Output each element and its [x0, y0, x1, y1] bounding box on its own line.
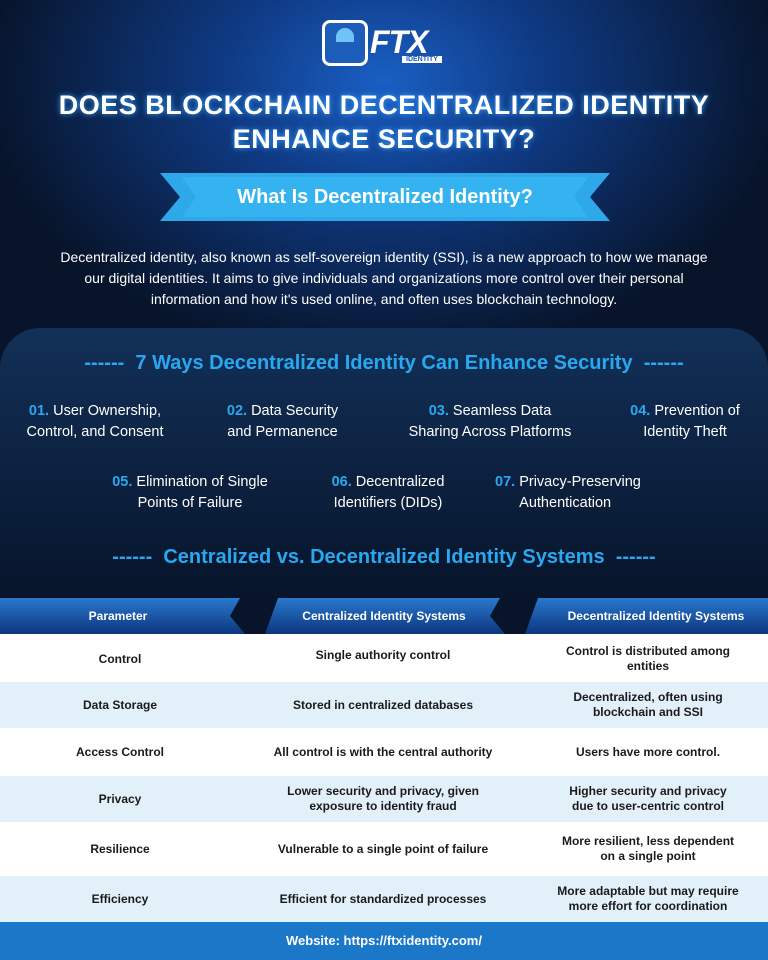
row: privacy: Privacy — [99, 792, 141, 806]
way 03: 03. Seamless Data — [429, 403, 551, 419]
way 02: and Permanence — [227, 424, 338, 440]
row: access control: All control is with the central authority — [274, 744, 492, 758]
title: ENHANCE SECURITY? — [233, 124, 535, 154]
row: privacy: Higher security and privacy — [569, 784, 727, 798]
row: efficiency: More adaptable but may require — [557, 884, 739, 898]
row: efficiency — [0, 876, 768, 922]
ribbon: what is decentralized identity: What Is Decentralized Identity? — [237, 186, 533, 208]
way 02 — [227, 403, 338, 440]
background glow — [0, 0, 768, 340]
way 01: Control, and Consent — [26, 424, 164, 440]
intro text: Decentralized identity, also known as self-sovereign identity (SSI), is a new approach to how we manage — [60, 249, 708, 265]
title — [56, 90, 711, 154]
way 07: 07. Privacy-Preserving — [495, 474, 641, 490]
heading: comparison: ------ Centralized vs. Decentralized Identity Systems ------ — [112, 546, 656, 568]
way 04: Identity Theft — [643, 424, 727, 440]
way 04: 04. Prevention of — [630, 403, 740, 419]
way 05 — [112, 474, 268, 511]
row: access control — [0, 728, 768, 776]
footer — [0, 922, 768, 960]
way 01 — [26, 403, 164, 440]
footer: Website: https://ftxidentity.com/ — [286, 933, 482, 948]
table header: Parameter — [89, 609, 148, 623]
intro text: our digital identities. It aims to give individuals and organizations more control over their personal — [84, 270, 684, 286]
row: resilience: Resilience — [90, 842, 150, 856]
way 07 — [495, 474, 641, 511]
row: efficiency: Efficient for standardized processes — [280, 892, 486, 906]
row: control: Control — [99, 652, 141, 666]
panel: 7 ways — [0, 328, 768, 600]
way 06: Identifiers (DIDs) — [334, 495, 442, 511]
table header: Decentralized Identity Systems — [568, 609, 745, 623]
row: efficiency: more effort for coordination — [569, 899, 727, 913]
table header — [0, 598, 768, 634]
row: control: Single authority control — [316, 648, 450, 662]
row: resilience: Vulnerable to a single point of failure — [278, 842, 488, 856]
way 03 — [409, 403, 571, 440]
row: privacy: due to user-centric control — [572, 799, 724, 813]
row: control: Control is distributed among — [566, 644, 730, 658]
way 07: Authentication — [519, 495, 611, 511]
row: resilience: on a single point — [600, 849, 696, 863]
row: resilience: More resilient, less dependent — [562, 834, 734, 848]
way 03: Sharing Across Platforms — [409, 424, 571, 440]
row: data storage: Data Storage — [83, 698, 157, 712]
way 05: Points of Failure — [138, 495, 242, 511]
way 05: 05. Elimination of Single — [112, 474, 268, 490]
logo — [322, 20, 442, 66]
table — [0, 598, 768, 922]
row: control: entities — [627, 659, 669, 673]
title: DOES BLOCKCHAIN DECENTRALIZED IDENTITY — [59, 90, 709, 120]
row: privacy: exposure to identity fraud — [309, 799, 457, 813]
row: data storage — [0, 682, 768, 728]
way 04 — [630, 403, 740, 440]
heading: 7 ways: ------ 7 Ways Decentralized Identity Can Enhance Security ------ — [84, 352, 684, 374]
row: efficiency: Efficiency — [92, 892, 148, 906]
row: privacy — [0, 776, 768, 822]
row: data storage: blockchain and SSI — [593, 705, 703, 719]
row: access control: Access Control — [76, 744, 164, 758]
way 06 — [332, 474, 444, 511]
row: resilience — [0, 822, 768, 876]
row: control — [0, 636, 768, 682]
ribbon: what is decentralized identity — [160, 173, 610, 221]
row: privacy: Lower security and privacy, given — [287, 784, 479, 798]
row: data storage: Stored in centralized databases — [293, 698, 473, 712]
way 06: 06. Decentralized — [332, 474, 444, 490]
intro text: information and how it's used online, and often uses blockchain technology. — [151, 291, 617, 307]
logo: IDENTITY — [406, 56, 438, 63]
row: data storage: Decentralized, often using — [573, 690, 723, 704]
row: access control: Users have more control. — [576, 744, 720, 758]
logo: FTX — [370, 24, 427, 60]
table header: Centralized Identity Systems — [302, 609, 466, 623]
intro text — [60, 249, 708, 307]
way 01: 01. User Ownership, — [29, 403, 161, 419]
way 02: 02. Data Security — [227, 403, 338, 419]
